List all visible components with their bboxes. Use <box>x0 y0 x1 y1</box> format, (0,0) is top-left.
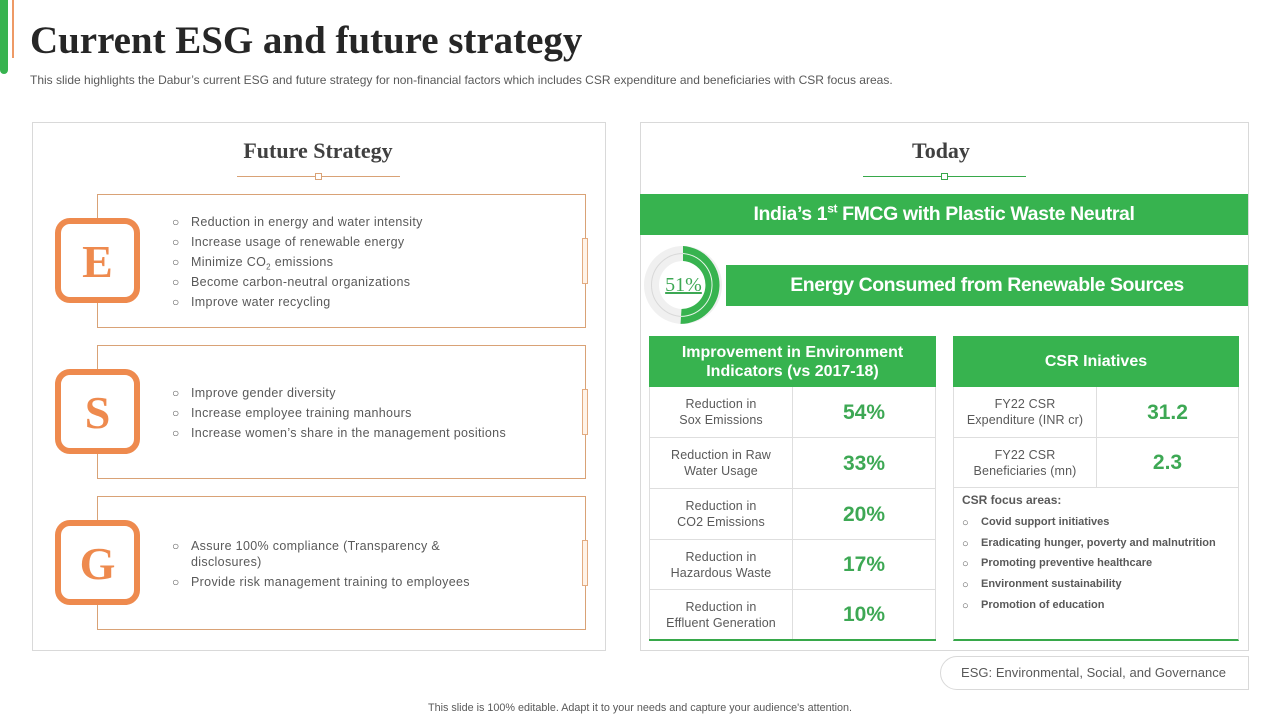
letter icon S <box>55 369 140 454</box>
value: 54%: 54% <box>843 400 885 424</box>
letter icon E: E <box>82 236 113 287</box>
row: effluent: Effluent Generation <box>666 616 776 630</box>
row: expenditure: FY22 CSR <box>995 397 1055 411</box>
value: 10% <box>792 589 936 640</box>
value: 20% <box>792 488 936 540</box>
letter icon G: G <box>80 538 115 589</box>
list: governance goals: Provide risk management training to employees <box>191 575 470 589</box>
heading: future strategy: Future Strategy <box>243 138 393 163</box>
table header: Indicators (vs 2017-18) <box>706 363 879 380</box>
row: co2 <box>649 488 793 540</box>
table base line <box>649 639 936 641</box>
list: social goals: Increase women’s share in the management positions <box>191 426 506 440</box>
row: environment: ○ <box>172 295 180 309</box>
letter icon S: S <box>85 387 110 438</box>
callout: esg definition <box>940 656 1249 690</box>
row: environment <box>55 194 588 328</box>
table header <box>649 336 936 387</box>
row: effluent: Reduction in <box>686 600 756 614</box>
row: environment: ○ <box>172 215 180 229</box>
row: waste <box>649 539 793 590</box>
row: water: Reduction in Raw <box>671 448 771 462</box>
row: environment: ○ <box>172 275 180 289</box>
list: environment goals: Become carbon-neutral organizations <box>191 275 410 289</box>
divider: today <box>863 173 1026 180</box>
row: sox <box>649 386 793 438</box>
accent bar <box>0 0 8 74</box>
row: social: ○ <box>172 426 180 440</box>
banner: plastic waste neutral: India’s 1st FMCG with Plastic Waste Neutral <box>753 202 1135 225</box>
table header <box>953 336 1239 387</box>
letter icon G <box>55 520 140 605</box>
row: social: ○ <box>172 386 180 400</box>
subtitle: This slide highlights the Dabur’s current ESG and future strategy for non-financial factors which includes CSR expenditure and beneficiaries with CSR focus areas. <box>30 73 893 87</box>
row: environment: ○ <box>172 255 180 269</box>
value: 54% <box>792 386 936 438</box>
value: 2.3 <box>1096 437 1239 488</box>
table: csr initiatives <box>953 336 1239 641</box>
row box <box>97 496 586 630</box>
row: governance: ○ <box>172 575 180 589</box>
row: beneficiaries <box>953 437 1097 488</box>
row: waste: Reduction in <box>686 550 756 564</box>
value: 20%: 20% <box>843 502 885 526</box>
row tab <box>582 540 588 586</box>
focus item 4: Environment sustainability <box>981 578 1122 590</box>
focus bullet 1: ○ <box>962 517 969 529</box>
row: sox: Sox Emissions <box>679 413 763 427</box>
row: expenditure <box>953 386 1097 438</box>
panel: future strategy <box>32 122 606 651</box>
focus bullet 5: ○ <box>962 600 969 612</box>
list: environment goals: Improve water recycling <box>191 295 331 309</box>
value: 33%: 33% <box>843 452 885 474</box>
row: co2: Reduction in <box>686 499 756 513</box>
callout: esg definition: ESG: Environmental, Social, and Governance <box>961 665 1226 680</box>
row box <box>97 194 586 328</box>
focus item 1: Covid support initiatives <box>981 516 1109 528</box>
row: governance: ○ <box>172 539 180 553</box>
donut chart: 51%: 51% <box>665 274 702 296</box>
heading: today: Today <box>912 138 970 163</box>
focus heading: CSR focus areas: <box>962 493 1061 507</box>
focus bullet 3: ○ <box>962 558 969 570</box>
value: 2.3: 2.3 <box>1153 451 1182 474</box>
row: beneficiaries: Beneficiaries (mn) <box>974 464 1076 478</box>
list: social goals: Increase employee training manhours <box>191 406 412 420</box>
row: water: Water Usage <box>684 464 758 478</box>
row: water <box>649 437 793 489</box>
value: 10%: 10% <box>843 603 885 626</box>
banner: renewable energy <box>726 265 1248 306</box>
row: governance <box>55 496 588 630</box>
panel: today <box>640 122 1249 651</box>
value: 33% <box>792 437 936 489</box>
focus bullet 2: ○ <box>962 538 969 550</box>
list: social goals: Improve gender diversity <box>191 386 336 400</box>
list: environment goals <box>172 215 423 309</box>
csr focus areas list <box>962 493 1216 612</box>
focus item 3: Promoting preventive healthcare <box>981 557 1152 569</box>
donut chart: 51% <box>644 246 722 324</box>
list: environment goals: Increase usage of renewable energy <box>191 235 404 249</box>
focus bullet 4: ○ <box>962 579 969 591</box>
list: governance goals <box>172 539 470 589</box>
row: sox: Reduction in <box>686 397 756 411</box>
list: governance goals: Assure 100% compliance (Transparency & <box>191 539 440 553</box>
row: social: ○ <box>172 406 180 420</box>
value: 17% <box>792 539 936 590</box>
list: social goals <box>172 386 506 440</box>
value: 17%: 17% <box>843 553 885 576</box>
divider: future strategy <box>237 173 400 180</box>
list: environment goals: Reduction in energy and water intensity <box>191 215 423 229</box>
row box <box>97 345 586 479</box>
letter icon E <box>55 218 140 303</box>
list: environment goals: Minimize CO2 emissions <box>191 255 333 272</box>
footer note: This slide is 100% editable. Adapt it to your needs and capture your audience's attention. <box>428 702 852 714</box>
row: effluent <box>649 589 793 640</box>
focus item 2: Eradicating hunger, poverty and malnutrition <box>981 537 1216 549</box>
row tab <box>582 389 588 435</box>
focus areas box <box>953 487 1239 641</box>
banner: renewable energy: Energy Consumed from Renewable Sources <box>790 274 1184 296</box>
table header: Improvement in Environment <box>682 344 903 361</box>
list: governance goals: disclosures) <box>191 555 262 569</box>
row tab <box>582 238 588 284</box>
row: co2: CO2 Emissions <box>677 515 765 529</box>
value: 31.2: 31.2 <box>1147 400 1188 424</box>
row: social <box>55 345 588 479</box>
row: environment: ○ <box>172 235 180 249</box>
title: Current ESG and future strategy <box>30 19 582 62</box>
banner: plastic waste neutral <box>640 194 1248 235</box>
table header: CSR Iniatives <box>1045 353 1147 370</box>
row: beneficiaries: FY22 CSR <box>995 448 1055 462</box>
value: 31.2 <box>1096 386 1239 438</box>
accent line <box>12 0 14 58</box>
row: expenditure: Expenditure (INR cr) <box>967 413 1083 427</box>
focus item 5: Promotion of education <box>981 599 1104 611</box>
table: environment indicators <box>649 336 936 641</box>
row: waste: Hazardous Waste <box>671 566 771 580</box>
